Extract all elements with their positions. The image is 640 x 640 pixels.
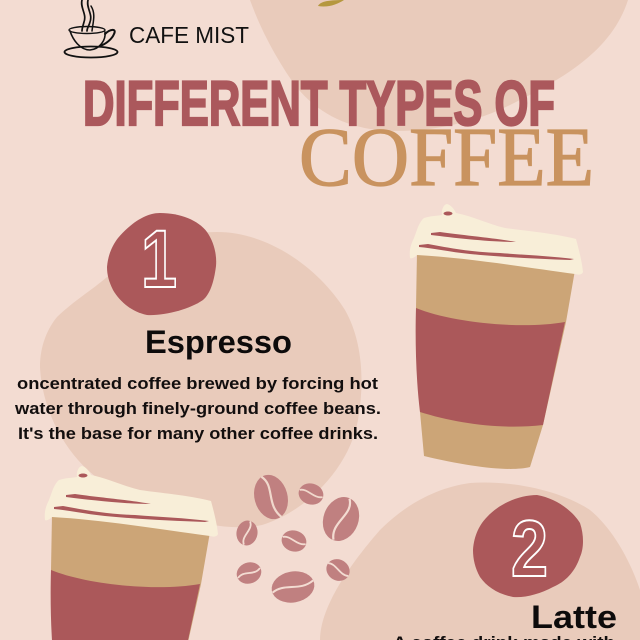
logo: Cafe Mist — [64, 0, 249, 58]
icon: takeaway cup right — [410, 204, 583, 469]
badge: number 2: 2 — [511, 504, 548, 593]
badge: number 1: 1 — [141, 214, 177, 305]
heading: Espresso: Espresso — [145, 324, 292, 360]
badge: number 2 — [473, 495, 583, 597]
panel: espresso blob — [40, 232, 362, 527]
icon: takeaway cup left — [45, 466, 218, 640]
badge: number 1 — [107, 213, 216, 315]
brand name: CAFE MIST — [129, 22, 249, 48]
text block: espresso description: water through finely-ground coffee beans. — [14, 399, 381, 418]
text block: espresso description: oncentrated coffee brewed by forcing hot — [17, 374, 378, 393]
icon: coffee beans — [234, 471, 365, 606]
title: coffee: COFFEE — [299, 111, 594, 204]
heading: Latte: Latte — [531, 599, 617, 635]
panel: latte blob — [320, 482, 640, 640]
text block: espresso description: It's the base for many other coffee drinks. — [18, 424, 378, 443]
top decorative blob — [250, 0, 628, 131]
icon: steaming coffee cup — [64, 0, 118, 58]
icon: leaf fragment — [318, 0, 344, 7]
